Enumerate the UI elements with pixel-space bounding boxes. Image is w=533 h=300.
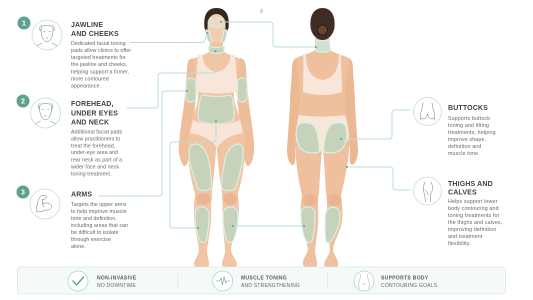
text block: pads allow clinics to offer <box>71 48 131 54</box>
benefit: muscle toning: MUSCLE TONING <box>241 275 287 281</box>
heading: FOREHEAD, <box>71 101 114 108</box>
text block: muscle tone. <box>448 151 480 157</box>
connector: arms <box>99 91 187 196</box>
icon: buttocks <box>414 98 442 126</box>
text block <box>71 130 122 177</box>
benefit: body contouring: SUPPORTS BODY <box>381 275 429 281</box>
text block: the jawline and cheeks, <box>71 62 127 68</box>
connector: calves <box>233 225 304 227</box>
back bra <box>303 54 342 95</box>
connector lines <box>99 8 410 229</box>
icon: leg <box>414 177 442 205</box>
front bra <box>195 55 238 94</box>
text block <box>448 199 502 247</box>
benefit: non-invasive: NON-INVASIVE <box>97 275 137 281</box>
text block <box>71 202 128 250</box>
text block: toning treatments for <box>448 213 500 219</box>
connector: forehead to back neck <box>221 22 316 47</box>
back arms <box>287 58 358 165</box>
text block: targeted treatments for <box>71 55 126 61</box>
icon: face <box>30 98 60 128</box>
heading: ARMS <box>71 192 92 198</box>
text block: body contouring and <box>448 206 499 212</box>
front briefs <box>190 120 243 148</box>
footer panel <box>18 267 506 294</box>
text block <box>71 41 131 90</box>
text block: through exercise <box>71 237 111 243</box>
benefit: muscle toning <box>213 271 300 291</box>
text block: treatments, helping <box>448 130 496 136</box>
text block: Supports buttock <box>448 116 490 122</box>
connector dots <box>186 21 348 229</box>
connector: jawline <box>130 34 207 42</box>
buttock pads <box>296 123 319 153</box>
benefit: body contouring: CONTOURING GOALS <box>381 283 438 289</box>
text block: definition and <box>448 144 481 150</box>
heading: CALVES <box>448 189 477 196</box>
badge 3: 3 <box>21 190 25 196</box>
text block: wider face and neck <box>71 164 119 170</box>
back head <box>310 8 335 40</box>
forehead pad <box>208 18 225 27</box>
front hair <box>204 8 229 34</box>
text block: including areas that can <box>71 223 128 229</box>
heading: THIGHS AND <box>448 181 493 188</box>
section 1: jawline and cheeks <box>18 16 131 90</box>
back neck pad <box>315 40 331 52</box>
badge 1: 1 <box>22 20 26 28</box>
text block: the thighs and calves, <box>448 220 502 226</box>
section 3: arms <box>16 186 128 250</box>
icon: flexed arm <box>30 189 60 219</box>
text block: more contoured <box>71 77 109 83</box>
text block: treat the forehead, <box>71 144 115 150</box>
front arms <box>179 58 254 166</box>
text block: alone. <box>71 244 86 250</box>
heading: UNDER EYES <box>71 110 118 117</box>
heading: AND NECK <box>71 119 109 126</box>
benefit: non-invasive: NO DOWNTIME <box>97 283 137 289</box>
text block: helping support a firmer, <box>71 69 129 75</box>
badge 2: 2 <box>21 98 25 106</box>
text block: Additional facial pads <box>71 130 122 136</box>
jaw pads <box>206 30 212 42</box>
back briefs <box>296 115 349 152</box>
front figure <box>179 8 254 268</box>
thigh pads <box>189 144 211 190</box>
calf pads <box>195 207 209 242</box>
connector: abdomen and calf <box>170 121 216 228</box>
back calf pads <box>301 207 315 242</box>
text block: appearance. <box>71 84 101 90</box>
text block: be difficult to isolate <box>71 230 119 236</box>
text block: under-eye area and <box>71 150 118 156</box>
neck pad <box>209 46 224 54</box>
back torso and legs <box>295 38 350 268</box>
section: thighs and calves <box>414 177 502 247</box>
connector: buttocks <box>341 110 410 139</box>
hair bun <box>318 25 328 35</box>
connector: thighs <box>347 167 410 190</box>
text block: allow practitioners to <box>71 136 120 142</box>
back treatment pads <box>296 40 347 242</box>
front face <box>208 12 226 42</box>
text block: to help improve muscle <box>71 209 127 215</box>
text block: Dedicated facial toning <box>71 41 126 47</box>
back knee shading <box>303 194 341 206</box>
text block: tone and definition, <box>71 216 117 222</box>
heading: JAWLINE <box>71 22 103 29</box>
text block <box>448 116 496 157</box>
connector: neck <box>127 51 216 108</box>
arm pads <box>186 78 196 102</box>
section: buttocks <box>414 98 496 157</box>
text block: rear neck as part of a <box>71 157 122 163</box>
abdomen pad <box>198 95 234 124</box>
text block: toning and lifting <box>448 123 489 129</box>
icon: face <box>32 20 62 50</box>
back figure <box>287 8 358 268</box>
text block: and treatment <box>448 234 483 240</box>
front torso and legs <box>188 38 245 268</box>
section 2: forehead, under eyes and neck <box>16 94 122 177</box>
heading: AND CHEEKS <box>71 31 119 38</box>
benefit: non-invasive <box>68 271 137 291</box>
text block: Helps support lower <box>448 199 498 205</box>
small marker <box>260 8 263 14</box>
benefit: muscle toning: AND STRENGTHENING <box>241 283 300 289</box>
front treatment pads <box>186 18 247 242</box>
heading: BUTTOCKS <box>448 105 488 112</box>
benefit: body contouring <box>354 271 438 291</box>
text block: improve shape, <box>448 137 486 143</box>
text block: improving definition <box>448 227 496 233</box>
text block: flexibility. <box>448 241 471 247</box>
text block: Targets the upper arms <box>71 202 127 208</box>
front knee shading <box>196 193 237 205</box>
text block: toning treatment. <box>71 171 112 177</box>
